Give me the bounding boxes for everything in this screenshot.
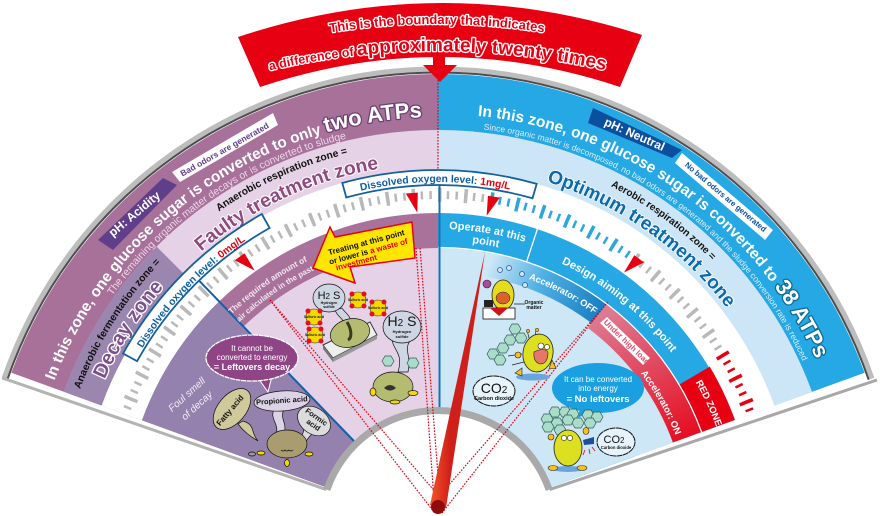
handwritten note: foul smell of decay <box>167 375 216 423</box>
heading: decay zone: Decay zone <box>91 281 163 380</box>
icon: CO2 cloud left: CO2 <box>481 380 508 396</box>
right zone heading: In this zone, one glucose sugar is converted to 38 ATPs <box>478 105 826 359</box>
illustration: sick microbe in bed with H2S: Sulfuric acid <box>304 315 324 319</box>
inner hub cutout <box>327 410 549 490</box>
illustration: eating microbe at table: Organic <box>525 300 544 306</box>
band label: operate at this point: Operate at this <box>450 222 526 242</box>
right zone note: Since organic matter is decomposed, no bad odors are generated and the sludge conversion rate is reduced <box>484 124 808 361</box>
dotted guide lines <box>270 248 608 513</box>
boundary lines <box>199 80 440 441</box>
speech bubble: no leftovers: = No leftovers <box>566 394 630 405</box>
inner hub rim <box>327 410 549 490</box>
band label: required air: air calculated in the past <box>237 266 314 322</box>
callout arrow: waste of investment: investment <box>335 253 378 272</box>
illustration: sick microbe in bed with H2S: sulfide <box>323 305 335 309</box>
band label: design aiming: Design aiming at this point <box>562 256 676 352</box>
tag: pH neutral: pH: Neutral <box>602 115 667 154</box>
illustration: decaying sludge with acid clouds: acid <box>305 417 323 433</box>
callout arrow: waste of investment <box>313 222 415 283</box>
callout arrow: waste of investment: or lower is a waste of <box>328 237 409 266</box>
band label: accelerator on: Accelerator: ON <box>640 371 682 435</box>
band label: red zone: RED ZONE <box>696 380 722 426</box>
panel: right half optimum treatment zone <box>438 74 865 489</box>
illustration: sick microbe in bed with H2S: Sulfuric acid <box>305 333 325 337</box>
label box: 0mg/L <box>122 212 271 362</box>
label: anaerobic fermentation zone: Anaerobic fermentation zone = <box>74 259 160 389</box>
label: aerobic respiration zone: Aerobic respiration zone = <box>611 181 716 259</box>
illustration: sick microbe in bed with H2S: Sulfuric acid <box>348 298 368 302</box>
illustration: sick microbe in bed with H2S: Sulfuric acid <box>368 306 388 310</box>
tag: pH acidity <box>98 178 177 250</box>
label box: 0mg/L: Dissolved oxygen level: 0mg/L <box>136 237 246 348</box>
callout arrow: waste of investment: Treating at this point <box>327 228 406 257</box>
icon: CO2 cloud left <box>473 376 515 406</box>
panel: left half decay and faulty zones <box>11 74 438 489</box>
speech bubble: no leftovers: It can be converted <box>564 375 632 384</box>
left zone note: The remaining organic matter decays or is converted to sludge <box>106 134 346 294</box>
tag: pH neutral <box>588 108 682 158</box>
tag: pH acidity: pH: Acidity <box>106 188 163 240</box>
illustration: crying microbe with H2S <box>370 311 421 404</box>
illustration: decaying sludge with acid clouds: Fatty acid <box>215 393 246 428</box>
illustration: sick microbe in bed with H2S: H2 S <box>318 290 340 302</box>
handwritten note: foul smell of decay: of decay <box>180 389 216 423</box>
speech bubble: leftovers decay <box>206 335 298 392</box>
speech bubble: leftovers decay: = Leftovers decay <box>214 362 290 372</box>
illustration: crying microbe with H2S: Hydrogen <box>393 329 412 334</box>
illustration: decaying sludge with acid clouds: Formic <box>304 406 329 428</box>
needle <box>430 252 485 514</box>
label: anaerobic respiration zone: Anaerobic respiration zone = <box>217 148 347 212</box>
illustration: crying microbe with H2S: sulfide <box>396 334 409 339</box>
illustration: sick microbe in bed with H2S: Hydrogen <box>321 301 337 305</box>
illustration: decaying sludge with acid clouds <box>206 382 336 466</box>
heading: optimum treatment zone: Optimum treatment zone <box>548 170 734 308</box>
illustration: eating microbe at table <box>483 266 544 319</box>
banner: boundary note: This is the boundary that indicates <box>328 13 546 34</box>
icon: CO2 cloud right: Carbon dioxide <box>601 445 632 450</box>
red triangle markers <box>235 193 644 278</box>
speech bubble: leftovers decay: It cannot be <box>231 344 273 353</box>
tag: bad odors: Bad odors are generated <box>178 120 271 178</box>
illustration: eating microbe at table: matter <box>526 305 542 311</box>
illustration: happy microbe with CO2 <box>541 407 603 472</box>
label box: 1mg/L: Dissolved oxygen level: 1mg/L <box>360 174 510 191</box>
heading: faulty treatment zone: Faulty treatment zone <box>192 158 379 252</box>
icon: CO2 cloud right: CO2 <box>604 434 625 446</box>
illustration: crying microbe with H2S: H2 S <box>388 313 416 329</box>
illustration: decaying sludge with acid clouds: Propionic acid <box>256 394 308 407</box>
icon: CO2 cloud left: Carbon dioxide <box>474 396 514 402</box>
icon: CO2 cloud right <box>597 428 635 456</box>
handwritten note: foul smell of decay: Foul smell <box>167 375 209 414</box>
label box: 1mg/L <box>341 169 538 200</box>
speech bubble: leftovers decay: converted to energy <box>217 353 287 362</box>
banner: boundary note <box>238 3 642 87</box>
banner: boundary note: a difference of approximately twenty times <box>268 36 608 72</box>
band label: operate at this point: point <box>472 237 500 248</box>
band label: accelerator off: Accelerator: OFF <box>528 274 598 312</box>
tag: under high load: Under high load <box>602 318 652 367</box>
speech bubble: no leftovers <box>552 363 644 418</box>
left zone heading: In this zone, one glucose sugar is converted to only two ATPs <box>44 102 422 380</box>
scale ticks <box>127 195 751 414</box>
tag: no bad odors: No bad odors are generated <box>683 160 768 234</box>
illustration: sick microbe in bed with H2S <box>304 284 388 362</box>
band label: required air: The required amount of <box>228 256 307 313</box>
speech bubble: no leftovers: into energy <box>578 384 618 393</box>
illustration: running microbe <box>487 324 556 380</box>
